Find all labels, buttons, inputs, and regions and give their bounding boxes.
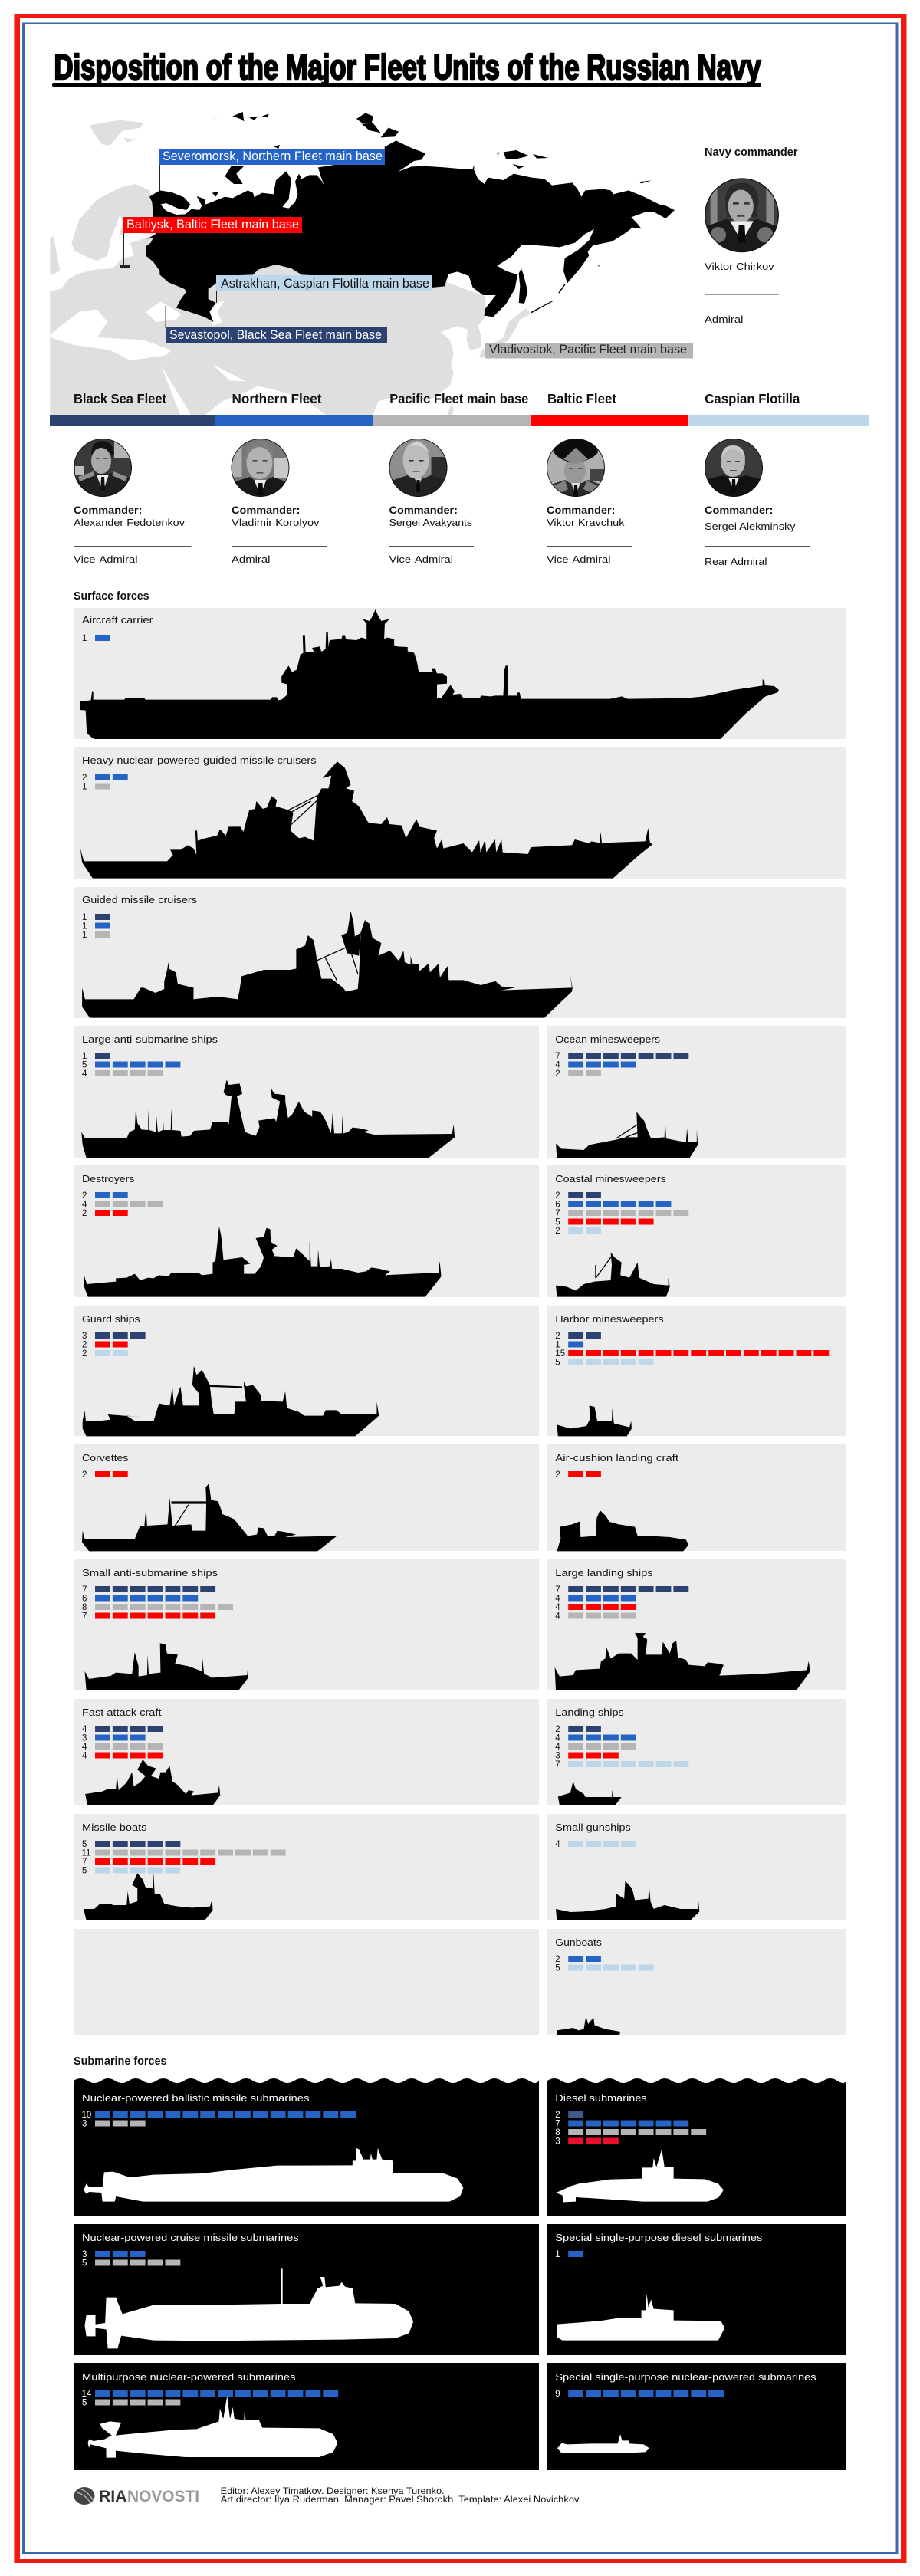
counts: heavy cruisers: 1 xyxy=(82,782,87,791)
panel: aircraft carrier xyxy=(74,608,846,739)
heading: submarine forces: Submarine forces xyxy=(74,2055,167,2068)
commander: Baltic Fleet: Commander: xyxy=(547,504,615,516)
portrait: Alekminsky xyxy=(705,439,763,497)
counts: fast attack craft xyxy=(82,1725,163,1760)
counts: gunboats xyxy=(555,1955,654,1973)
commander: Baltic Fleet: Viktor Kravchuk xyxy=(547,517,625,528)
commander: Pacific Fleet: Vice-Admiral xyxy=(389,554,453,565)
commander: Black Sea Fleet: Alexander Fedotenkov xyxy=(74,517,186,528)
counts: ocean minesweepers: 2 xyxy=(555,1070,560,1079)
counts: small anti-submarine ships: 7 xyxy=(82,1612,87,1621)
counts: multipurpose submarines: 14 xyxy=(81,2390,92,2399)
logo: RIA Novosti: RIA xyxy=(99,2488,127,2505)
panel: guided missile cruisers: Guided missile cruisers xyxy=(82,894,198,905)
commander: Black Sea Fleet: Vice-Admiral xyxy=(74,554,138,565)
counts: large anti-submarine ships xyxy=(82,1052,180,1079)
fleet names: Baltic Fleet xyxy=(547,391,616,406)
panel: large anti-submarine ships: Large anti-submarine ships xyxy=(82,1033,219,1045)
counts: coastal minesweepers: 2 xyxy=(555,1191,560,1201)
panel: harbor minesweepers: Harbor minesweepers xyxy=(555,1313,664,1325)
ship: gunboat xyxy=(557,2016,620,2036)
counts: diesel submarines: 2 xyxy=(555,2111,560,2120)
counts: small gunships: 4 xyxy=(555,1840,560,1849)
base label: Baltiysk: Baltiysk, Baltic Fleet main base xyxy=(127,217,299,232)
panel: small gunships: Small gunships xyxy=(555,1822,631,1833)
fleet colour bar xyxy=(50,415,869,426)
panel: large landing ships: Large landing ships xyxy=(555,1567,653,1579)
counts: ballistic missile submarines xyxy=(81,2111,356,2128)
panel: landing ships xyxy=(547,1699,846,1806)
commander: Caspian Flotilla: Rear Admiral xyxy=(705,556,767,567)
base label: Baltiysk xyxy=(120,217,302,268)
ship: small anti-submarine ship xyxy=(85,1643,248,1691)
ship: coastal minesweeper xyxy=(556,1252,670,1297)
commander: Northern Fleet: Admiral xyxy=(232,554,271,565)
panel: ocean minesweepers xyxy=(547,1026,846,1158)
panel: landing ships: Landing ships xyxy=(555,1707,624,1718)
ship: missile boat xyxy=(84,1873,212,1921)
portrait: Fedotenkov xyxy=(74,439,132,497)
credits: Art director: Ilya Ruderman. Manager: Pavel Shorokh. Template: Alexei Novichkov. xyxy=(221,2494,581,2505)
counts: guard ships xyxy=(82,1332,146,1359)
panel: small anti-submarine ships xyxy=(74,1559,539,1691)
counts: landing ships: 7 xyxy=(555,1760,560,1769)
counts: coastal minesweepers: 5 xyxy=(555,1217,560,1227)
panel: coastal minesweepers xyxy=(547,1165,846,1297)
portrait: Kravchuk xyxy=(547,439,605,497)
logo: RIA Novosti xyxy=(74,2487,199,2505)
base label: Severomorsk: Severomorsk, Northern Fleet main base xyxy=(163,149,383,163)
counts: gunboats: 2 xyxy=(555,1955,560,1964)
commander: Pacific Fleet: Sergei Avakyants xyxy=(389,517,473,528)
heading: surface forces: Surface forces xyxy=(74,590,149,603)
portrait: Avakyants xyxy=(389,439,448,497)
credits xyxy=(221,2486,581,2505)
counts: ocean minesweepers: 7 xyxy=(555,1052,560,1061)
commander: Caspian Flotilla: Sergei Alekminsky xyxy=(705,521,796,532)
counts: ocean minesweepers: 4 xyxy=(555,1061,560,1070)
counts: diesel submarines: 7 xyxy=(555,2119,560,2128)
commander: Caspian Flotilla: Commander: xyxy=(705,504,773,516)
commander name: Viktor Chirkov xyxy=(705,261,774,272)
counts: large anti-submarine ships: 1 xyxy=(82,1052,87,1061)
counts: landing ships: 4 xyxy=(555,1743,560,1752)
panel: special single-purpose diesel submarines xyxy=(547,2224,846,2355)
fleet colour legend xyxy=(50,391,869,426)
ship: air-cushion landing craft xyxy=(557,1510,688,1551)
credits: Editor: Alexey Timatkov. Designer: Ksenya Turenko. xyxy=(221,2486,445,2496)
counts: small gunships xyxy=(555,1840,636,1849)
counts: landing ships: 3 xyxy=(555,1751,560,1760)
panel: heavy nuclear-powered guided missile cruisers: Heavy nuclear-powered guided missile cruisers xyxy=(82,754,317,766)
counts: special diesel submarines: 1 xyxy=(555,2250,560,2259)
panel: small gunships xyxy=(547,1814,846,1921)
counts: landing ships xyxy=(555,1725,688,1769)
ship: ocean minesweeper xyxy=(556,1112,698,1158)
commander: Caspian Flotilla xyxy=(705,439,810,567)
panel: air-cushion landing craft xyxy=(547,1444,846,1551)
commander: Pacific Fleet: Commander: xyxy=(389,504,458,516)
ship: small gunship xyxy=(556,1881,699,1921)
commander: Northern Fleet xyxy=(232,439,327,565)
counts: guided cruisers: 1 xyxy=(82,931,87,940)
counts: landing ships: 2 xyxy=(555,1725,560,1734)
counts: aircraft carrier xyxy=(82,634,110,643)
panel: gunboats: Gunboats xyxy=(555,1937,602,1948)
commander: Northern Fleet: Commander: xyxy=(232,504,301,516)
counts: destroyers: 4 xyxy=(82,1201,87,1210)
panel: air-cushion landing craft: Air-cushion landing craft xyxy=(555,1452,678,1464)
ship: fast attack craft xyxy=(85,1760,220,1806)
portrait: Viktor Chirkov xyxy=(705,178,779,252)
counts: harbor minesweepers: 2 xyxy=(555,1332,560,1341)
map: Russia silhouette xyxy=(146,112,675,322)
counts: cruise missile submarines: 3 xyxy=(82,2250,87,2259)
counts: harbor minesweepers xyxy=(555,1332,831,1368)
counts: destroyers xyxy=(82,1191,163,1218)
counts: coastal minesweepers: 2 xyxy=(555,1227,560,1236)
counts: coastal minesweepers: 7 xyxy=(555,1209,560,1218)
commander: Black Sea Fleet xyxy=(74,439,192,565)
ship: corvette xyxy=(82,1484,337,1551)
counts: large landing ships xyxy=(555,1585,688,1621)
counts: guard ships: 3 xyxy=(82,1332,87,1341)
fleet names: Caspian Flotilla xyxy=(705,391,800,406)
panel: nuclear-powered ballistic missile submarines: Nuclear-powered ballistic missile submarines xyxy=(82,2092,310,2104)
fleet names: Black Sea Fleet xyxy=(74,391,166,406)
panel: destroyers: Destroyers xyxy=(82,1173,135,1184)
counts: ocean minesweepers xyxy=(555,1052,688,1079)
counts: guided cruisers: 1 xyxy=(82,922,87,931)
navy commander heading: Navy commander xyxy=(705,146,798,159)
ship: landing ship xyxy=(558,1781,622,1806)
panel: nuclear-powered cruise missile submarines xyxy=(74,2224,539,2355)
ship: destroyer xyxy=(84,1226,442,1297)
counts: ballistic missile submarines: 3 xyxy=(82,2119,87,2128)
counts: corvettes: 2 xyxy=(82,1470,87,1480)
commander: Black Sea Fleet: Commander: xyxy=(74,504,143,516)
counts: harbor minesweepers: 5 xyxy=(555,1359,560,1368)
panel: missile boats xyxy=(74,1814,539,1921)
panel: large anti-submarine ships xyxy=(74,1026,539,1158)
counts: air-cushion landing craft xyxy=(555,1470,601,1480)
ship: guided missile cruiser xyxy=(82,911,573,1018)
submarine: ballistic missile xyxy=(84,2148,463,2202)
base label: Sevastopol xyxy=(166,306,387,343)
ship: large anti-submarine ship xyxy=(81,1079,455,1158)
counts: harbor minesweepers: 15 xyxy=(555,1349,565,1359)
counts: cruise missile submarines xyxy=(82,2250,180,2268)
ship: large landing ship xyxy=(555,1633,810,1691)
counts: cruise missile submarines: 5 xyxy=(82,2259,87,2268)
panel: guard ships: Guard ships xyxy=(82,1313,140,1325)
counts: guided cruisers: 1 xyxy=(82,913,87,922)
counts: coastal minesweepers: 6 xyxy=(555,1201,560,1210)
counts: small anti-submarine ships: 7 xyxy=(82,1585,87,1595)
submarine: special nuclear xyxy=(557,2434,649,2453)
commander: Pacific Fleet xyxy=(389,439,474,565)
panel: empty xyxy=(74,1929,539,2036)
panel: special single-purpose diesel submarines: Special single-purpose diesel submarines xyxy=(555,2232,763,2243)
counts: fast attack craft: 4 xyxy=(82,1725,87,1734)
panel: multipurpose nuclear-powered submarines: Multipurpose nuclear-powered submarines xyxy=(82,2371,296,2383)
panel: nuclear-powered ballistic missile submarines xyxy=(74,2078,539,2216)
panel: diesel submarines xyxy=(547,2078,846,2216)
logo globe xyxy=(74,2487,95,2505)
fleet names: Northern Fleet xyxy=(232,391,322,406)
counts: missile boats xyxy=(81,1840,286,1875)
counts: harbor minesweepers: 1 xyxy=(555,1340,560,1349)
counts: small anti-submarine ships: 6 xyxy=(82,1595,87,1604)
base label: Vladivostok: Vladivostok, Pacific Fleet main base xyxy=(489,342,687,356)
panel: aircraft carrier: Aircraft carrier xyxy=(82,614,153,626)
counts: missile boats: 11 xyxy=(81,1849,90,1858)
panel: corvettes: Corvettes xyxy=(82,1452,129,1464)
panel: small anti-submarine ships: Small anti-submarine ships xyxy=(82,1567,219,1579)
panel: multipurpose nuclear-powered submarines xyxy=(74,2363,539,2470)
counts: missile boats: 7 xyxy=(82,1858,87,1867)
counts: guided cruisers xyxy=(82,913,110,940)
counts: heavy cruisers xyxy=(82,774,128,791)
counts: guard ships: 2 xyxy=(82,1349,87,1359)
counts: fast attack craft: 3 xyxy=(82,1734,87,1743)
counts: gunboats: 5 xyxy=(555,1964,560,1973)
ship: heavy cruiser xyxy=(80,761,652,879)
base label: Vladivostok xyxy=(485,317,693,359)
fleet names: Pacific Fleet main base xyxy=(389,391,529,406)
panel: fast attack craft: Fast attack craft xyxy=(82,1707,162,1718)
counts: large landing ships: 7 xyxy=(555,1585,560,1595)
panel: guided missile cruisers xyxy=(74,887,846,1018)
submarine: diesel xyxy=(556,2149,724,2202)
ship: aircraft carrier xyxy=(80,610,779,739)
counts: landing ships: 4 xyxy=(555,1734,560,1743)
ship: guard ship xyxy=(83,1366,379,1436)
counts: aircraft carrier: 1 xyxy=(82,634,87,643)
counts: missile boats: 5 xyxy=(82,1840,87,1849)
panel: harbor minesweepers xyxy=(547,1306,846,1436)
panel: special single-purpose nuclear-powered submarines: Special single-purpose nuclear-powered submarines xyxy=(555,2371,816,2383)
counts: guard ships: 2 xyxy=(82,1340,87,1349)
counts: fast attack craft: 4 xyxy=(82,1751,87,1760)
counts: large anti-submarine ships: 5 xyxy=(82,1061,87,1070)
counts: large landing ships: 4 xyxy=(555,1612,560,1621)
counts: special nuclear submarines: 9 xyxy=(555,2390,560,2399)
counts: multipurpose submarines xyxy=(81,2390,338,2407)
base label: Astrakhan: Astrakhan, Caspian Flotilla main base xyxy=(221,276,429,291)
panel: special single-purpose nuclear-powered submarines xyxy=(547,2363,846,2470)
ship: harbor minesweeper xyxy=(557,1405,632,1436)
base label: Sevastopol: Sevastopol, Black Sea Fleet main base xyxy=(169,327,382,342)
counts: destroyers: 2 xyxy=(82,1209,87,1218)
map: grey surrounding land xyxy=(50,120,531,422)
counts: small anti-submarine ships: 8 xyxy=(82,1603,87,1612)
navy commander block xyxy=(705,146,798,325)
panel: guard ships xyxy=(74,1306,539,1436)
logo: RIA Novosti: NOVOSTI xyxy=(127,2488,199,2505)
counts: large landing ships: 4 xyxy=(555,1595,560,1604)
counts: missile boats: 5 xyxy=(82,1866,87,1875)
counts: diesel submarines xyxy=(555,2111,706,2147)
counts: ballistic missile submarines: 10 xyxy=(81,2111,91,2120)
counts: large anti-submarine ships: 4 xyxy=(82,1070,87,1079)
submarine: multipurpose xyxy=(88,2396,337,2458)
commander: Northern Fleet: Vladimir Korolyov xyxy=(232,517,320,528)
counts: corvettes xyxy=(82,1470,128,1480)
map: seas cut from the land xyxy=(50,215,414,422)
panel: missile boats: Missile boats xyxy=(82,1822,147,1833)
counts: fast attack craft: 4 xyxy=(82,1743,87,1752)
counts: diesel submarines: 8 xyxy=(555,2128,560,2137)
panel: fast attack craft xyxy=(74,1699,539,1806)
panel: destroyers xyxy=(74,1165,539,1297)
commander: Baltic Fleet xyxy=(547,439,632,565)
commander: Baltic Fleet: Vice-Admiral xyxy=(547,554,611,565)
base label: Astrakhan xyxy=(216,275,432,303)
commander rank: Admiral xyxy=(705,314,744,325)
counts: diesel submarines: 3 xyxy=(555,2137,560,2147)
counts: large landing ships: 4 xyxy=(555,1603,560,1612)
submarine: special diesel xyxy=(557,2294,724,2341)
counts: destroyers: 2 xyxy=(82,1191,87,1201)
counts: special diesel submarines xyxy=(555,2250,583,2259)
panel: diesel submarines: Diesel submarines xyxy=(555,2092,647,2104)
counts: heavy cruisers: 2 xyxy=(82,774,87,783)
panel: heavy nuclear-powered guided missile cruisers xyxy=(74,748,846,879)
panel: corvettes xyxy=(74,1444,539,1551)
counts: multipurpose submarines: 5 xyxy=(82,2398,87,2407)
panel: large landing ships xyxy=(547,1559,846,1691)
submarine: cruise missile xyxy=(85,2268,413,2348)
counts: small anti-submarine ships xyxy=(82,1585,233,1621)
fleet names xyxy=(74,391,800,406)
counts: air-cushion landing craft: 2 xyxy=(555,1470,560,1480)
panel: coastal minesweepers: Coastal minesweepers xyxy=(555,1173,666,1184)
base label: Severomorsk xyxy=(159,149,385,192)
counts: coastal minesweepers xyxy=(555,1191,688,1236)
portrait: Korolyov xyxy=(232,439,290,497)
panel: gunboats xyxy=(547,1929,846,2036)
panel: nuclear-powered cruise missile submarines: Nuclear-powered cruise missile submarines xyxy=(82,2232,299,2243)
map of Eurasia with Russia highlighted xyxy=(50,112,675,422)
panel: ocean minesweepers: Ocean minesweepers xyxy=(555,1033,661,1045)
